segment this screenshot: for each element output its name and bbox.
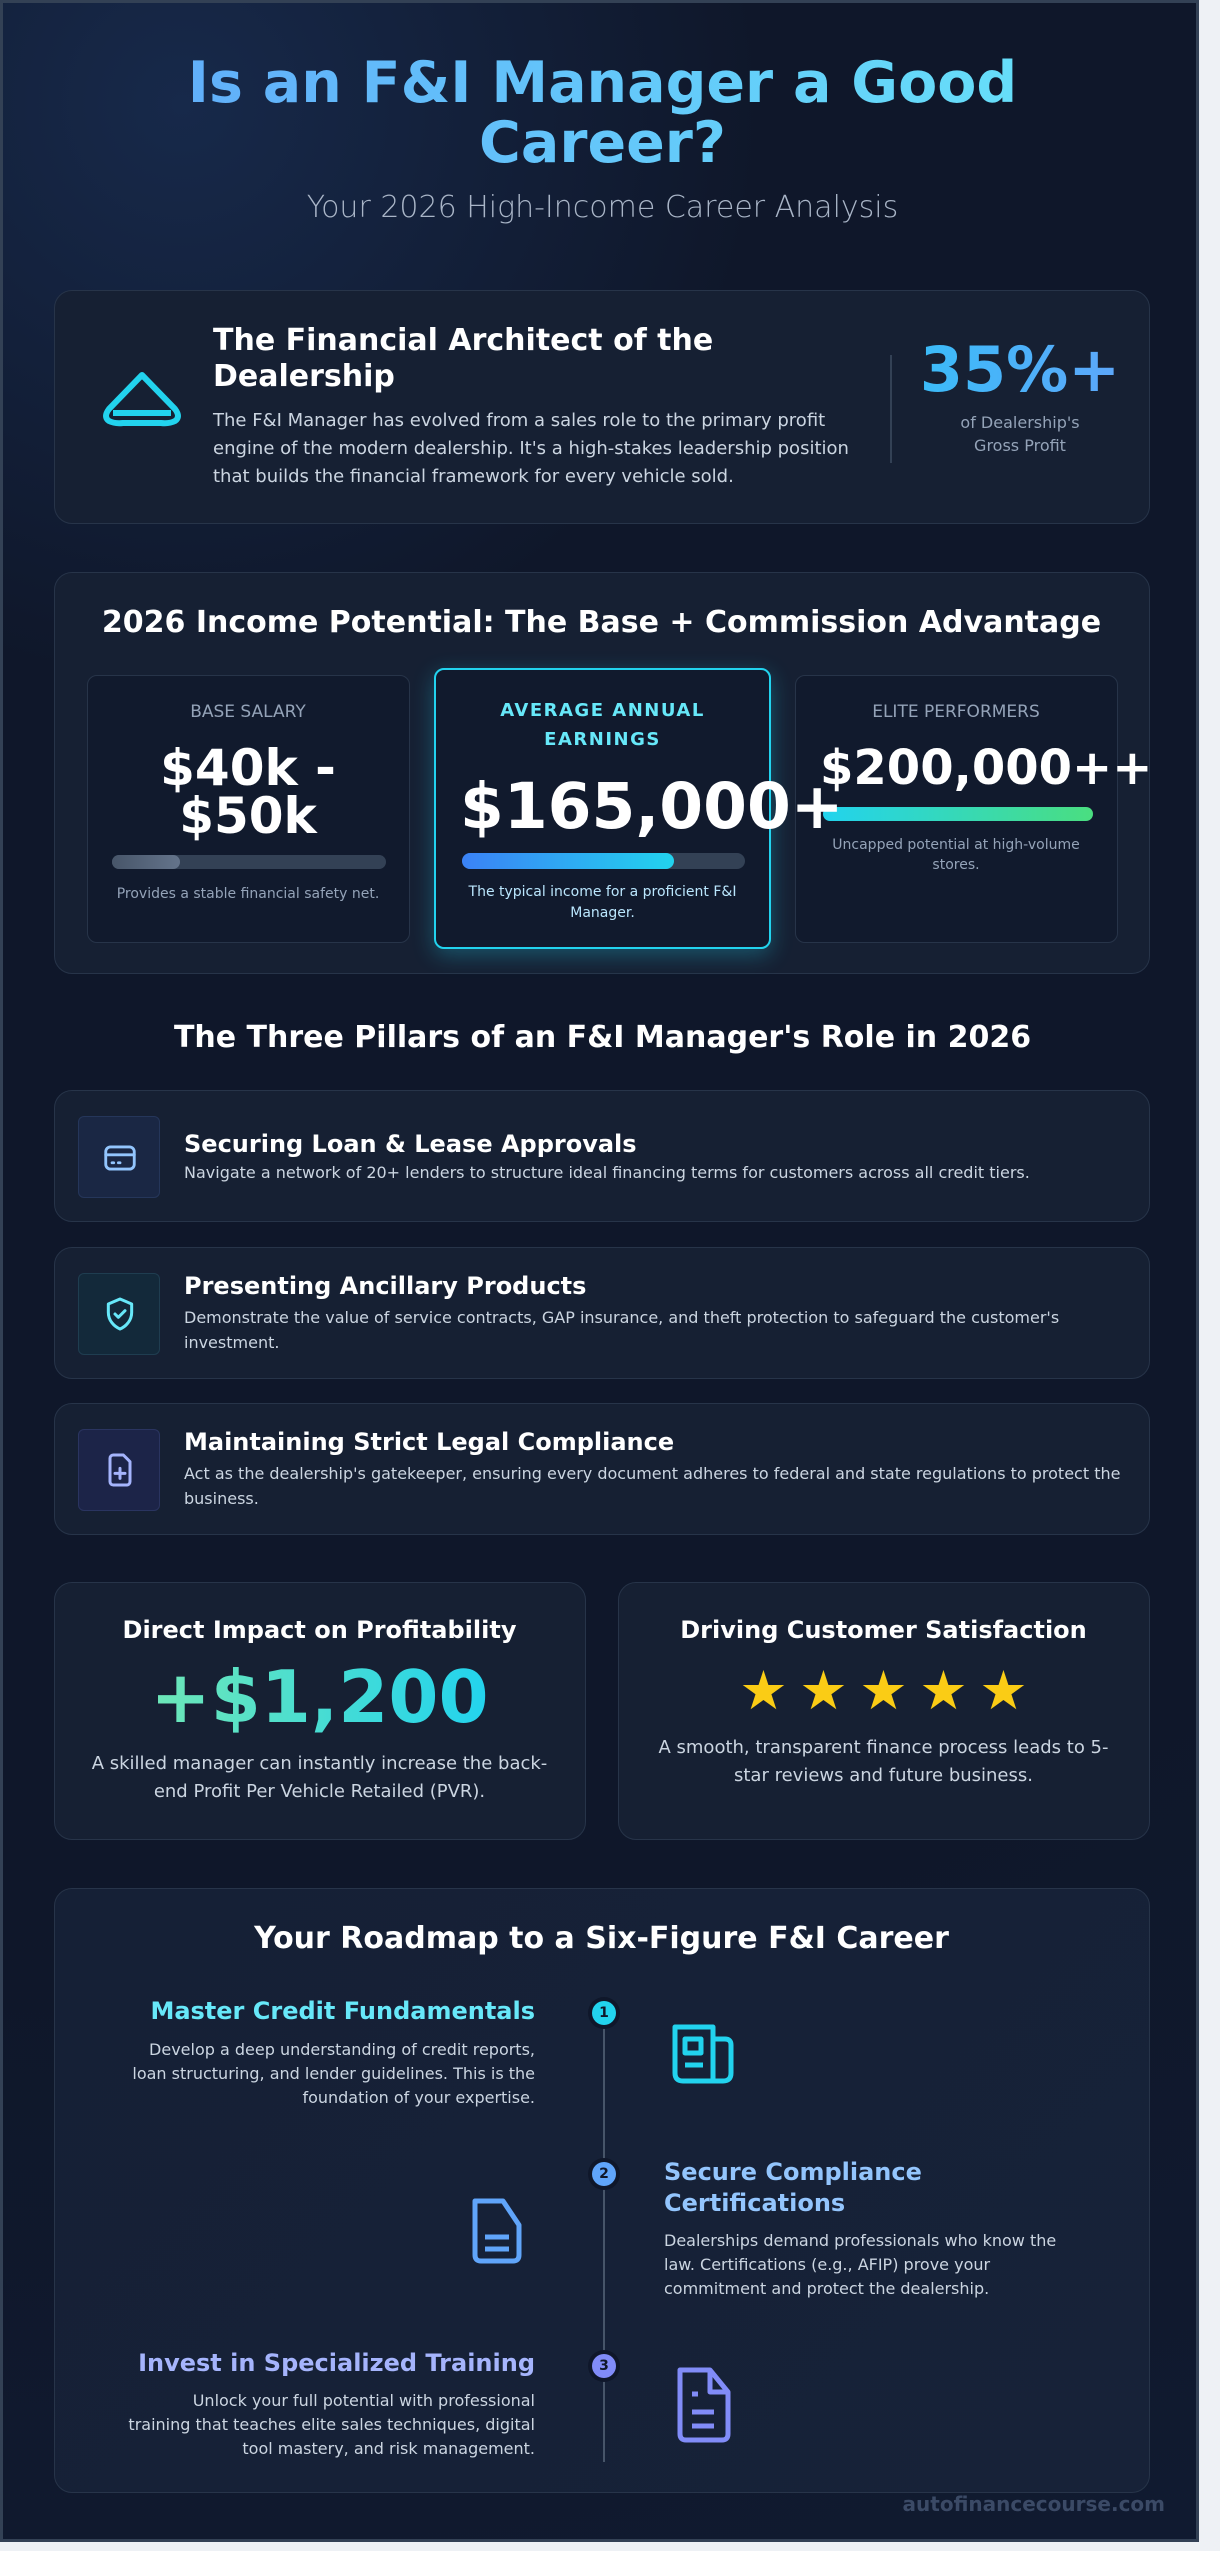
- step 2: commitment and protect the dealership.: [664, 2279, 989, 2298]
- title: Is an F&I Manager a Good: [188, 50, 1017, 116]
- icon: stars: ★: [919, 1659, 968, 1722]
- step 2: Dealerships demand professionals who know the: [664, 2231, 1056, 2250]
- stat: 35%: [920, 333, 1120, 455]
- step 1: loan structuring, and lender guidelines. This is the: [132, 2064, 535, 2083]
- sub-card: base salary: [87, 675, 410, 943]
- sub-card: elite performers: ELITE PERFORMERS: [872, 702, 1040, 722]
- sub-card: elite performers: $200,000++: [820, 740, 1152, 796]
- icon: stars: ★: [979, 1659, 1028, 1722]
- sub-card: average earnings: Manager.: [570, 905, 635, 921]
- sub-card: average earnings: [434, 668, 771, 949]
- subtitle: Your 2026 High-Income Career Analysis: [307, 190, 898, 225]
- step 2: [472, 2158, 1056, 2298]
- icon: document: [472, 2198, 522, 2264]
- step 3: [128, 2349, 730, 2458]
- step 3: tool mastery, and risk management.: [242, 2439, 535, 2458]
- heading: three pillars: The Three Pillars of an F&I Manager's Role in 2026: [174, 1020, 1031, 1055]
- icon: shield: [78, 1273, 160, 1355]
- icon: stars: [739, 1659, 1028, 1722]
- panel: financial architect: [54, 290, 1150, 524]
- icon: credit card: [78, 1116, 160, 1198]
- icon: newspaper: [672, 2024, 734, 2084]
- sub-card: base salary: $40k -: [160, 739, 336, 797]
- sub-card: elite performers: [795, 675, 1118, 943]
- panel: profitability: [54, 1582, 586, 1840]
- step 1: Master Credit Fundamentals: [150, 1997, 535, 2025]
- step 3: training that teaches elite sales techniques, digital: [128, 2415, 535, 2434]
- panel: pillar 3: [54, 1403, 1150, 1535]
- panel: profitability: Direct Impact on Profitability: [123, 1616, 516, 1644]
- step 3: Unlock your full potential with professional: [193, 2391, 535, 2410]
- heading: 2026 Income Potential: The Base + Commission Advantage: [102, 605, 1101, 640]
- panel: pillar 3: Maintaining Strict Legal Compliance: [184, 1428, 674, 1456]
- panel: pillar 2: Presenting Ancillary Products: [184, 1272, 586, 1300]
- step 1: foundation of your expertise.: [302, 2088, 535, 2107]
- panel: pillar 2: [54, 1247, 1150, 1379]
- panel: pillar 1: [54, 1090, 1150, 1222]
- sub-card: elite performers: stores.: [932, 857, 980, 873]
- stat: 35%: 35%+: [920, 333, 1120, 406]
- icon: stars: ★: [739, 1659, 788, 1722]
- panel: roadmap: [54, 1888, 1150, 2493]
- step 2: Certifications: [664, 2189, 845, 2217]
- sub-card: base salary: $50k: [179, 787, 317, 845]
- panel: profitability: A skilled manager can instantly increase the back-end Profit Per Vehicle Retailed (PVR).: [92, 1753, 547, 1802]
- step 3: Invest in Specialized Training: [138, 2349, 535, 2377]
- sub-card: base salary: Provides a stable financial safety net.: [117, 886, 379, 902]
- step 1: 1: [599, 2005, 609, 2021]
- panel: income potential: [54, 572, 1150, 974]
- panel: roadmap: Your Roadmap to a Six-Figure F&I Career: [254, 1921, 949, 1956]
- step 1: [132, 1997, 734, 2107]
- step 3: 3: [599, 2358, 609, 2374]
- panel: satisfaction: Driving Customer Satisfaction: [680, 1616, 1087, 1644]
- sub-card: average earnings: AVERAGE ANNUAL: [500, 700, 705, 721]
- panel: pillar 3: Act as the dealership's gatekeeper, ensuring every document adheres to federal and state regulations to protect the business.: [184, 1464, 1120, 1508]
- panel: pillar 1: Navigate a network of 20+ lenders to structure ideal financing terms for customers across all credit tiers.: [184, 1163, 1030, 1182]
- step 2: law. Certifications (e.g., AFIP) prove your: [664, 2255, 990, 2274]
- step 2: Secure Compliance: [664, 2158, 922, 2186]
- icon: car: [103, 372, 181, 426]
- icon: stars: ★: [799, 1659, 848, 1722]
- footer: autofinancecourse.com: [903, 2492, 1165, 2516]
- sub-card: elite performers: Uncapped potential at high-volume: [832, 837, 1080, 853]
- sub-card: average earnings: EARNINGS: [544, 729, 661, 750]
- step 1: Develop a deep understanding of credit reports,: [149, 2040, 535, 2059]
- panel: satisfaction: A smooth, transparent finance process leads to 5-star reviews and future business.: [658, 1737, 1109, 1786]
- panel: satisfaction: [618, 1582, 1150, 1840]
- title: Career?: [479, 110, 726, 176]
- heading: The Financial Architect of the Dealership: [213, 323, 713, 394]
- text block: The F&I Manager has evolved from a sales role to the primary profit engine of the modern dealership. It's a high-stakes leadership position that builds the financial framework for every vehicle sold.: [213, 410, 849, 487]
- panel: pillar 2: Demonstrate the value of service contracts, GAP insurance, and theft protection to safeguard the customer's investment.: [184, 1308, 1059, 1352]
- step 2: 2: [599, 2166, 609, 2182]
- icon: stars: ★: [859, 1659, 908, 1722]
- stat: +$1,200: +$1,200: [150, 1655, 489, 1739]
- stat: 35%: of Dealership's: [960, 413, 1080, 432]
- stat: 35%: Gross Profit: [974, 436, 1066, 455]
- title: [3, 53, 1202, 173]
- sub-card: average earnings: The typical income for a proficient F&I: [469, 884, 736, 900]
- panel: pillar 1: Securing Loan & Lease Approvals: [184, 1130, 637, 1158]
- sub-card: average earnings: $165,000+: [460, 770, 844, 843]
- sub-card: base salary: BASE SALARY: [190, 702, 306, 722]
- icon: file text: [678, 2368, 730, 2442]
- icon: file plus: [78, 1429, 160, 1511]
